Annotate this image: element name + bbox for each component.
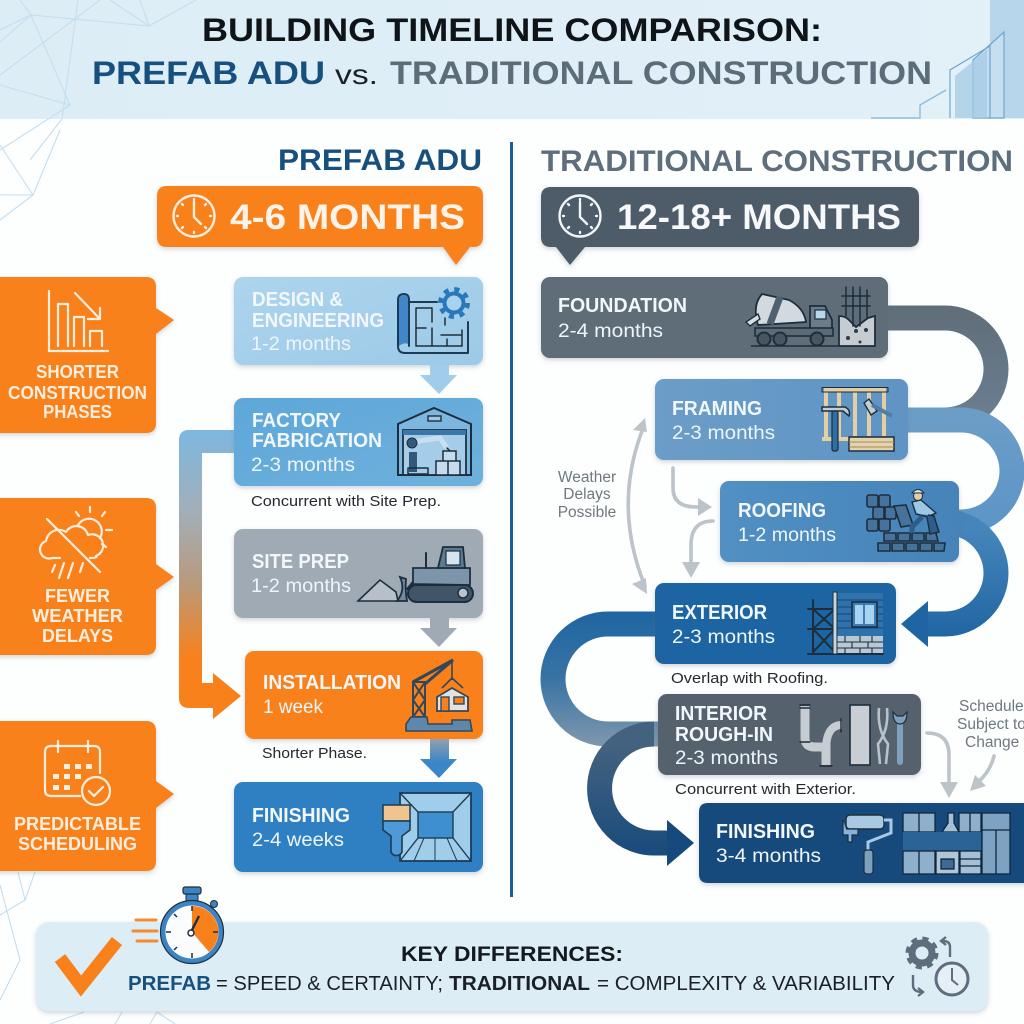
- card: installation: 1 week: [263, 697, 323, 718]
- arrow: schedule note to finishing: [970, 756, 994, 791]
- icon: calendar with check: [45, 741, 110, 805]
- decorative network lines: [0, 119, 175, 1024]
- note: schedule subject to change: Subject to: [957, 716, 1024, 733]
- card: foundation: [541, 277, 888, 358]
- icon: bulldozer: [358, 547, 473, 602]
- card: foundation: 2-4 months: [558, 321, 663, 342]
- building outlines: [871, 0, 1024, 118]
- card: framing: FRAMING: [672, 398, 762, 420]
- card: interior rough-in: INTERIOR: [675, 703, 768, 725]
- callout: shorter construction phases: [0, 277, 174, 433]
- arrow: site prep to installation: [420, 618, 457, 647]
- icon: concrete mixer truck and foundation: [746, 287, 875, 346]
- arrow: interior to finishing schedule: [927, 733, 958, 798]
- card: framing: [655, 379, 908, 460]
- icon: blueprint and gear: [398, 290, 468, 353]
- icon: pipes and tools: [800, 705, 907, 766]
- text: key differences summary: TRADITIONAL: [449, 973, 590, 995]
- icon: roofer laying tiles: [867, 490, 945, 551]
- icon: wood frame and hammers: [822, 388, 894, 451]
- caption: concurrent with exterior: Concurrent with Exterior.: [675, 781, 856, 798]
- card: design and engineering: DESIGN &: [252, 289, 343, 311]
- card: finishing (prefab): FINISHING: [252, 805, 350, 827]
- card: roofing: 1-2 months: [738, 525, 836, 546]
- caption: overlap with roofing: Overlap with Roofing.: [671, 670, 828, 687]
- divider: [510, 142, 513, 897]
- callout: predictable scheduling: SCHEDULING: [18, 834, 137, 854]
- note: schedule subject to change: [957, 698, 1024, 751]
- text: key differences heading: KEY DIFFERENCES:: [401, 943, 623, 966]
- card: interior rough-in: ROUGH-IN: [675, 724, 773, 746]
- card: factory fabrication: FABRICATION: [252, 430, 382, 452]
- icon: clock: [560, 196, 600, 236]
- card: exterior: 2-3 months: [672, 627, 775, 648]
- icon: crossed-out weather: [40, 507, 112, 578]
- icon: orange check mark: [60, 941, 117, 986]
- connector: interior to finishing: [600, 734, 694, 866]
- note: weather delays possible: Delays: [563, 486, 611, 503]
- header band: [0, 0, 1024, 150]
- card: design and engineering: [234, 277, 483, 365]
- callout: shorter construction phases: PHASES: [43, 402, 112, 422]
- callout: fewer weather delays: WEATHER: [32, 606, 123, 626]
- text: key differences summary: [128, 973, 895, 995]
- card: factory fabrication: FACTORY: [252, 410, 342, 432]
- card: framing: 2-3 months: [672, 423, 775, 444]
- card: finishing (traditional): 3-4 months: [716, 846, 821, 867]
- callout: shorter construction phases: CONSTRUCTION: [8, 383, 147, 403]
- title: TRADITIONAL CONSTRUCTION: [390, 55, 932, 91]
- card: finishing (traditional): FINISHING: [716, 821, 815, 843]
- icon: crane lifting house: [406, 660, 472, 731]
- card: site prep: [234, 529, 483, 618]
- card: roofing: ROOFING: [738, 500, 826, 522]
- connector: foundation to framing: [880, 318, 996, 420]
- card: installation: INSTALLATION: [263, 672, 401, 694]
- icon: kitchen: [903, 813, 1010, 874]
- arrow: design to factory: [420, 365, 457, 394]
- card: exterior: [655, 583, 896, 664]
- heading: traditional construction: TRADITIONAL CONSTRUCTION: [541, 145, 1013, 178]
- badge: 4-6 months: [157, 186, 483, 265]
- arrow: framing to roofing overlap: [673, 468, 712, 516]
- card: factory fabrication: 2-3 months: [251, 455, 355, 476]
- callout: fewer weather delays: DELAYS: [42, 626, 113, 646]
- icon: stopwatch: [133, 887, 224, 964]
- icon: scaffold and siding: [808, 592, 883, 654]
- note: weather delays possible: [558, 469, 616, 521]
- card: site prep: SITE PREP: [252, 551, 349, 573]
- arrow: roofing to exterior overlap: [682, 521, 713, 578]
- icon: room and paint brush: [383, 793, 471, 861]
- card: roofing: [720, 481, 959, 562]
- title: vs.: [335, 59, 378, 90]
- card: finishing (traditional): [699, 803, 1024, 883]
- callout: fewer weather delays: [0, 498, 174, 655]
- text: key differences summary: = SPEED & CERTAINTY;: [216, 973, 443, 995]
- badge: 12-18+ months: [541, 187, 919, 265]
- card: factory fabrication: [234, 398, 483, 486]
- card: site prep: 1-2 months: [251, 576, 351, 597]
- icon: factory with robot arm: [398, 408, 471, 475]
- callout: shorter construction phases: SHORTER: [36, 362, 119, 382]
- callout: fewer weather delays: FEWER: [45, 586, 110, 606]
- card: installation: [245, 651, 483, 739]
- callout: predictable scheduling: PREDICTABLE: [14, 814, 141, 834]
- connector: framing to roofing: [900, 420, 1012, 522]
- caption: shorter phase: Shorter Phase.: [262, 745, 367, 762]
- card: finishing (prefab): [234, 782, 483, 872]
- title: BUILDING TIMELINE COMPARISON:: [202, 12, 822, 48]
- arrow: weather delays span: [628, 418, 647, 594]
- connector: roofing to exterior: [901, 522, 996, 647]
- note: weather delays possible: Weather: [558, 469, 616, 486]
- icon: paint roller: [843, 815, 891, 874]
- card: exterior: EXTERIOR: [672, 602, 768, 624]
- title: PREFAB ADU: [92, 55, 325, 91]
- title: [92, 12, 932, 91]
- badge: 4-6 months: 4-6 MONTHS: [230, 198, 465, 237]
- text: key differences summary: = COMPLEXITY & VARIABILITY: [597, 973, 895, 995]
- card: design and engineering: 1-2 months: [251, 334, 351, 355]
- icon: gear, clock and cycle arrows: [909, 937, 968, 996]
- badge: 12-18+ months: 12-18+ MONTHS: [617, 198, 901, 237]
- caption: concurrent with site prep: Concurrent with Site Prep.: [251, 493, 441, 510]
- text: key differences summary: PREFAB: [128, 973, 211, 995]
- card: interior rough-in: [658, 694, 921, 775]
- icon: falling bar chart: [49, 291, 108, 351]
- connector: exterior to interior: [553, 624, 662, 734]
- card: finishing (prefab): 2-4 weeks: [252, 830, 344, 851]
- note: weather delays possible: Possible: [558, 504, 616, 521]
- arrow: installation to finishing: [420, 739, 457, 778]
- note: schedule subject to change: Change: [965, 734, 1019, 751]
- note: schedule subject to change: Schedule: [959, 698, 1024, 715]
- callout: predictable scheduling: [0, 721, 174, 871]
- icon: clock: [174, 196, 214, 236]
- card: interior rough-in: 2-3 months: [675, 748, 778, 769]
- card: design and engineering: ENGINEERING: [252, 310, 384, 332]
- card: foundation: FOUNDATION: [558, 295, 687, 317]
- heading: prefab ADU: PREFAB ADU: [278, 144, 482, 177]
- arrow: factory to installation: [179, 430, 241, 719]
- panel: key differences: [36, 887, 988, 1011]
